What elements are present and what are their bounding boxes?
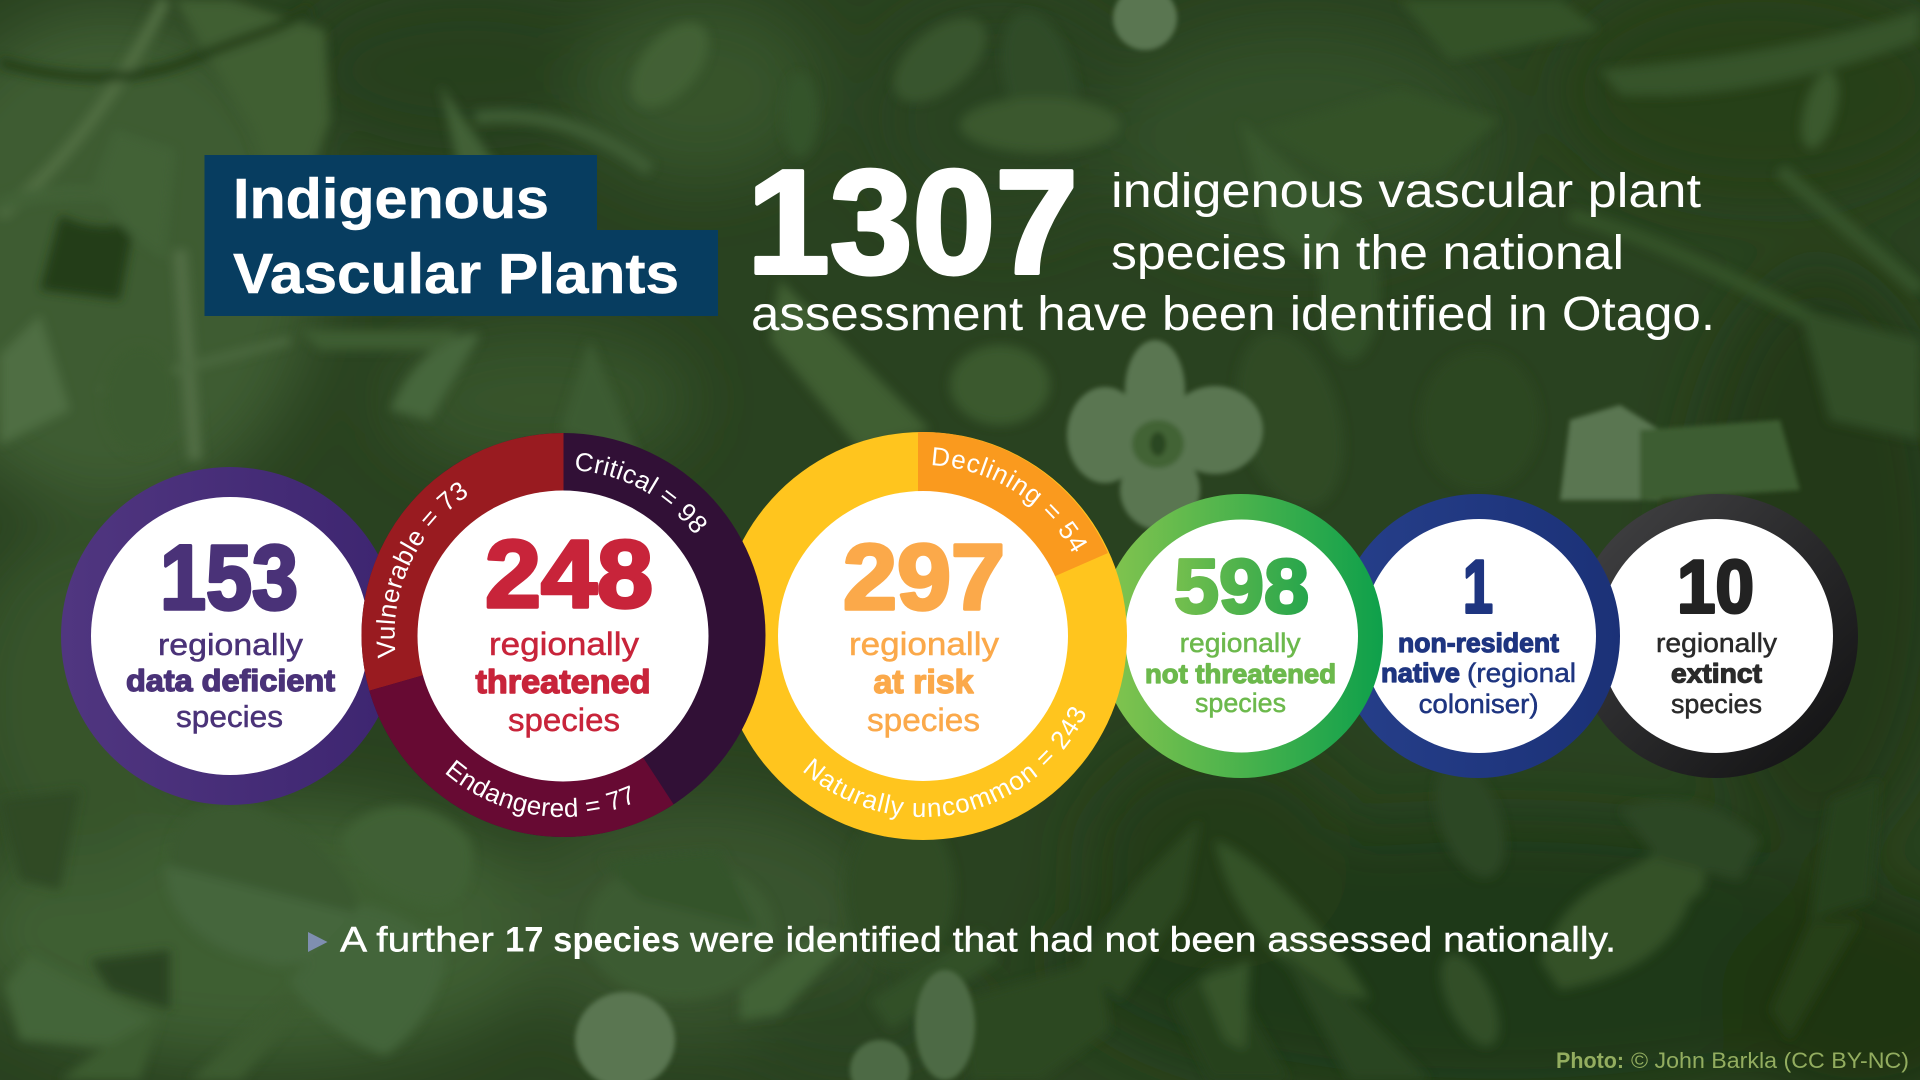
headline stat: 1307: assessment have been identified in Otago. (751, 288, 1715, 341)
title block: Indigenous (233, 167, 549, 231)
circle: non-resident native (1): native (1381, 658, 1460, 688)
circle: regionally not threatened (598): regionally (1180, 628, 1301, 658)
circle: non-resident native (1): non-resident (1398, 628, 1559, 658)
title block (204, 155, 718, 316)
bottom centre (585, 860, 775, 1000)
circle: regionally threatened (248): Vulnerable = 73 (376, 482, 467, 658)
bottom left leaves (168, 802, 360, 964)
circle: regionally data deficient (153): data deficient (126, 663, 335, 698)
circle: regionally data deficient (153) (61, 467, 399, 805)
circle: regionally threatened (248): Critical = 98 (576, 453, 706, 533)
circle: regionally data deficient (153): species (176, 699, 283, 734)
circle: regionally threatened (248): threatened (476, 663, 650, 700)
ring segment: endangered (369, 635, 674, 837)
photo credit: © John Barkla (CC BY-NC) (1631, 1048, 1909, 1073)
circle: regionally not threatened (598): not threatened (1145, 659, 1336, 689)
note: further 17 species: A further (340, 920, 494, 960)
ring segment: declining (918, 432, 1108, 636)
circle: non-resident native (1): 1 (1463, 545, 1493, 629)
circle: regionally extinct (10): regionally (1656, 628, 1778, 658)
circle: regionally threatened (248) (361, 433, 766, 837)
note: further 17 species (308, 920, 1616, 960)
circle: non-resident native (1): coloniser) (1419, 689, 1539, 719)
circle: regionally not threatened (598): species (1195, 688, 1286, 718)
circle: non-resident native (1): (regional (1467, 658, 1576, 688)
circle: regionally threatened (248): 248 (485, 521, 653, 628)
headline stat: 1307: 1307 (747, 140, 1078, 305)
flowers (575, 0, 1800, 1080)
icon: triangle bullet (308, 932, 328, 952)
circle: regionally threatened (248): species (508, 702, 620, 738)
circle: regionally data deficient (153): 153 (160, 527, 298, 629)
circle: regionally at risk (297) (742, 432, 1127, 840)
note: further 17 species: were identified that had not been assessed nationally. (689, 920, 1616, 960)
circle: regionally at risk (297): regionally (849, 626, 999, 662)
headline stat: 1307: indigenous vascular plant (1111, 165, 1701, 218)
circle: regionally not threatened (598) (1099, 494, 1383, 778)
circle: regionally at risk (297): Declining = 54 (932, 447, 1087, 552)
circle: regionally extinct (10): 10 (1677, 545, 1754, 629)
headline stat: 1307 (747, 140, 1715, 341)
bottom right leaves (1215, 840, 1370, 1000)
circle: regionally at risk (297): 297 (843, 525, 1005, 629)
circle: non-resident native (1) (1336, 494, 1620, 778)
ring segment: vulnerable (361, 433, 564, 691)
circle: regionally threatened (248): Endangered = 77 (446, 760, 630, 818)
stems and grass top left (175, 0, 330, 240)
circle: regionally extinct (10): extinct (1671, 659, 1762, 689)
photo credit: Photo: (1556, 1048, 1624, 1073)
circle: regionally at risk (297): Naturally uncommon = 243 (803, 707, 1086, 820)
circle: regionally at risk (297): at risk (874, 663, 974, 700)
circle: regionally extinct (10) (1574, 494, 1858, 778)
circle: regionally at risk (297): species (867, 702, 980, 738)
headline stat: 1307: species in the national (1111, 227, 1624, 280)
circle: regionally not threatened (598): 598 (1174, 544, 1309, 630)
circle: regionally threatened (248): regionally (489, 626, 639, 662)
title block: Vascular Plants (233, 242, 679, 306)
note: further 17 species: 17 species (505, 920, 680, 960)
spiny leaves centre top (988, 3, 1092, 157)
circle: regionally extinct (10): species (1671, 689, 1762, 719)
circle: regionally data deficient (153): regionally (158, 627, 304, 662)
